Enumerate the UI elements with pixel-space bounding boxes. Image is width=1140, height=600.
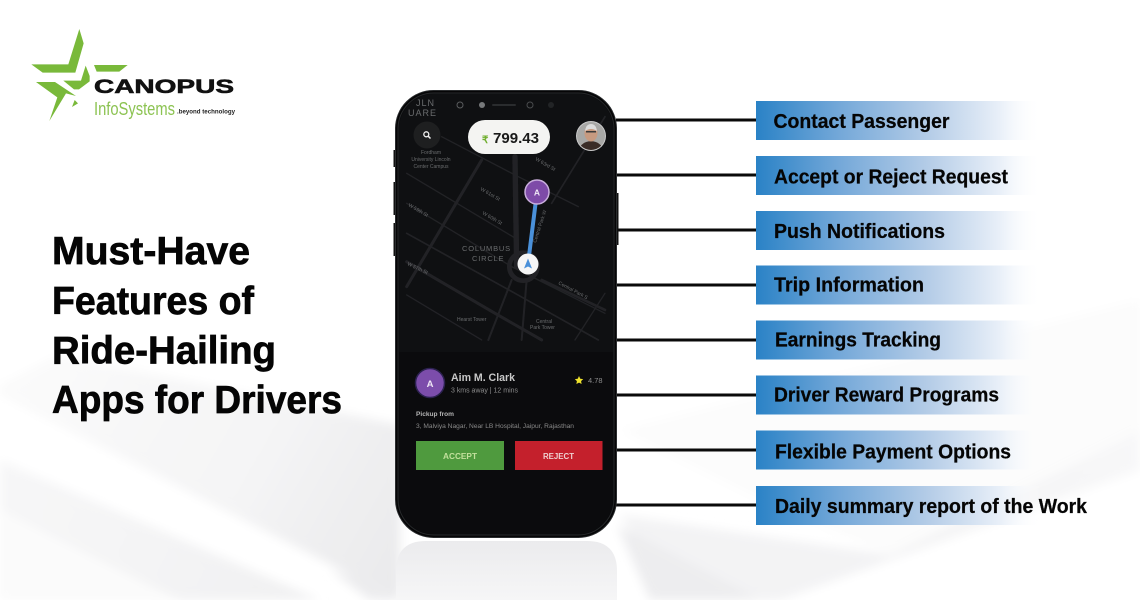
fare pill [468,120,550,154]
feature: Trip Information: Trip Information [774,274,924,296]
destination pin [525,180,549,204]
title: Apps for Drivers [52,379,342,422]
rating [575,376,602,385]
feature: Driver Reward Programs [756,376,1042,414]
logo tagline: .beyond technology [177,108,235,116]
map labels: Park Tower [530,325,555,331]
feature: Contact Passenger: Contact Passenger [774,110,950,133]
feature: Trip Information [756,266,1042,304]
connector lines [616,120,757,505]
feature: Flexible Payment Options: Flexible Payment Options [775,440,1011,464]
current position marker [518,254,538,274]
route line [527,204,538,254]
rating: 4.78 [588,376,602,385]
details panel [399,352,613,537]
map labels: Center Campus [413,164,449,170]
pickup label: Pickup from [416,412,454,418]
map labels: W 63rd St [534,157,557,173]
accept button: ACCEPT [443,452,477,461]
passenger distance: 3 kms away | 12 mins [451,388,518,394]
map labels: COLUMBUS [462,244,511,253]
driver avatar [576,121,606,152]
title: Must-Have [52,230,250,273]
passenger name: Aim M. Clark [451,372,516,384]
passenger avatar: A [427,379,434,390]
map labels: University Lincoln [411,157,451,163]
feature: Contact Passenger [756,101,1042,140]
feature: Flexible Payment Options [756,430,1042,470]
accept button [416,441,504,470]
map roads [407,117,605,340]
fare pill: ₹ [482,135,489,146]
map labels: CIRCLE [472,254,504,263]
passenger avatar [416,368,444,398]
map labels: W 60th St [481,211,504,227]
reject button: REJECT [543,452,574,461]
map screen [405,100,606,342]
map labels: Central [536,319,552,325]
feature: Accept or Reject Request [756,156,1042,195]
feature: Push Notifications: Push Notifications [774,220,945,243]
fare pill: 799.43 [493,131,539,147]
phone reflection [396,541,617,600]
background [8,390,1093,600]
phone body [396,90,616,538]
map labels: Central Park W [532,209,548,244]
phone [394,90,618,538]
logo subtitle: InfoSystems [94,99,175,119]
feature: Earnings Tracking: Earnings Tracking [775,328,941,352]
title [52,230,342,422]
reject button [515,441,602,470]
map labels [406,98,589,331]
map labels: UARE [408,108,437,118]
map labels: Hearst Tower [457,317,487,323]
map labels: JLN [416,98,435,108]
logo [31,29,235,121]
search button [414,122,440,148]
title: Ride-Hailing [52,330,276,372]
title: Features of [52,280,255,323]
feature: Accept or Reject Request: Accept or Reject Request [774,166,1008,188]
map labels: Fordham [421,150,441,156]
camera dots [457,102,554,108]
map labels: Central Park S [557,280,589,301]
logo wordmark: CANOPUS [94,76,234,98]
phone side buttons [394,150,618,256]
feature: Earnings Tracking [756,320,1042,360]
destination pin: A [534,188,540,198]
feature: Daily summary report of the Work: Daily summary report of the Work [775,495,1088,518]
feature: Push Notifications [756,211,1042,250]
logo star mark [31,29,128,121]
feature: Driver Reward Programs: Driver Reward Programs [774,384,999,406]
pickup address: 3, Malviya Nagar, Near LB Hospital, Jaipur, Rajasthan [416,424,574,430]
feature: Daily summary report of the Work [756,486,1088,525]
map labels: W 59th St [407,203,430,219]
map labels: W 61st St [479,187,501,203]
map labels: W 57th St [406,261,429,276]
